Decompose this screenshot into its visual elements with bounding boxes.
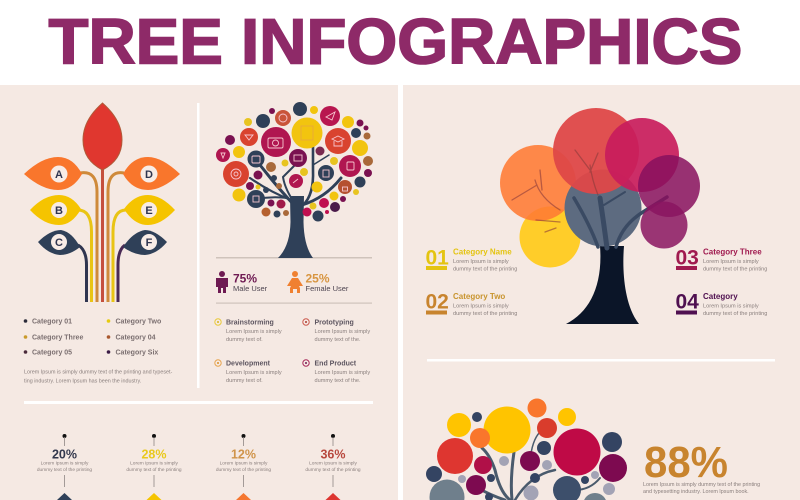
item: end product: End Product xyxy=(314,360,357,368)
chart: leaf stem diagram xyxy=(24,103,180,302)
tree icons xyxy=(221,112,354,202)
category 03: Lorem Ipsum is simply xyxy=(703,259,759,265)
chart: overlapping circle tree xyxy=(500,108,700,324)
item: brainstorming: dummy text of. xyxy=(226,337,263,343)
item: prototyping xyxy=(303,319,370,343)
category 04 xyxy=(676,290,767,317)
category 01: Category Name xyxy=(453,248,512,256)
item: development: Development xyxy=(226,360,271,368)
category 04: Lorem Ipsum is simply xyxy=(703,304,759,310)
stat: 12%: Lorem Ipsum is simply xyxy=(220,460,268,466)
item: development: Lorem Ipsum is simply xyxy=(226,370,282,376)
circle: magenta xyxy=(605,118,679,192)
stat: 36%: dummy text of the printing xyxy=(305,467,361,473)
stat: 28%: 28% xyxy=(141,448,167,462)
leaf F: F xyxy=(146,237,153,249)
stat: male user: 75% xyxy=(233,272,257,286)
stat: 88% xyxy=(643,438,760,495)
text block: left paragraph: Lorem Ipsum is simply dummy text of the printing and typeset- xyxy=(24,370,173,376)
item: prototyping: Lorem Ipsum is simply xyxy=(314,329,370,335)
stat: 28%: Lorem Ipsum is simply xyxy=(130,460,178,466)
stat: 88%: Lorem Ipsum is simply dummy text of the printing xyxy=(643,482,760,488)
category 02: 02 xyxy=(426,290,449,314)
stat: 36%: Lorem Ipsum is simply xyxy=(309,460,357,466)
item: end product xyxy=(303,360,370,384)
leaf A: A xyxy=(55,169,63,181)
leaf D: D xyxy=(145,169,153,181)
category 01 xyxy=(426,246,517,272)
item: end product: dummy text of the. xyxy=(314,378,361,384)
stat: 88%: and typesetting industry. Lorem Ipsum book. xyxy=(643,489,749,495)
leaf B: B xyxy=(55,205,63,217)
stat: 20%: dummy text of the printing xyxy=(37,467,92,473)
leaf C: C xyxy=(55,237,63,249)
tree branches xyxy=(478,432,600,500)
item: development: dummy text of. xyxy=(226,378,263,384)
category 04: 04 xyxy=(676,290,699,314)
stat: 28% xyxy=(126,434,182,500)
leaf D xyxy=(123,157,180,190)
category 04: dummy text of the printing xyxy=(703,311,767,317)
text block: left paragraph: ting industry. Lorem Ipsum has been the industry. xyxy=(24,378,141,384)
icon: female figure xyxy=(287,271,303,293)
leaf A xyxy=(24,157,82,190)
stat: female user: 25% xyxy=(306,272,330,286)
category 02: dummy text of the printing xyxy=(453,311,517,317)
leaf E: E xyxy=(145,205,153,217)
legend: categories: Category Two xyxy=(116,318,161,326)
legend: categories: Category 05 xyxy=(32,350,72,356)
branches inside slate circle xyxy=(574,192,667,248)
stat: 12%: 12% xyxy=(231,448,256,462)
leaf F xyxy=(123,230,167,255)
tree circles xyxy=(216,102,373,222)
item: prototyping: dummy text of the. xyxy=(314,337,361,343)
category 03: 03 xyxy=(676,246,699,270)
legend: categories: Category Six xyxy=(116,350,158,356)
circle: orange xyxy=(500,145,576,221)
leaf E xyxy=(124,195,175,225)
circle: red xyxy=(553,108,639,194)
item: prototyping: Prototyping xyxy=(314,320,354,326)
stat: 20%: Lorem Ipsum is simply xyxy=(41,460,89,466)
circle: slate xyxy=(564,170,642,246)
leaf C xyxy=(38,230,80,255)
stat: 12%: dummy text of the printing xyxy=(216,467,271,473)
circle: yellow xyxy=(520,206,580,268)
category 01: Lorem Ipsum is simply xyxy=(453,259,509,265)
category 03: Category Three xyxy=(703,248,762,256)
stat: 28%: dummy text of the printing xyxy=(126,467,182,473)
stat: female user: Female User xyxy=(306,284,349,293)
legend: categories: Category Three xyxy=(32,334,83,342)
circle: purple xyxy=(638,155,700,217)
text block: left paragraph xyxy=(24,370,173,384)
chart: icon tree xyxy=(216,102,373,258)
category 01: 01 xyxy=(426,246,449,270)
category 03 xyxy=(676,246,767,272)
icon: red top leaf xyxy=(83,103,122,170)
legend: categories: Category 04 xyxy=(116,334,156,342)
stat: 20%: 20% xyxy=(52,448,77,462)
stems xyxy=(78,165,126,302)
stat: 88%: 88% xyxy=(644,438,728,487)
stat: 20% xyxy=(37,434,92,500)
tree trunk and branches xyxy=(250,140,341,258)
leaf B xyxy=(30,195,81,225)
stat: 36% xyxy=(305,434,361,500)
legend: categories: Category 01 xyxy=(32,318,72,326)
item: brainstorming: Lorem Ipsum is simply xyxy=(226,329,282,335)
stat: male user xyxy=(216,271,268,293)
chart: bottom tree xyxy=(426,398,627,500)
item: end product: Lorem Ipsum is simply xyxy=(314,370,370,376)
stat: male user: Male User xyxy=(233,284,268,293)
category 01: dummy text of the printing xyxy=(453,266,517,272)
category 02: Lorem Ipsum is simply xyxy=(453,304,509,310)
category 03: dummy text of the printing xyxy=(703,266,767,272)
legend: categories xyxy=(24,318,161,356)
item: development xyxy=(215,360,282,384)
title: TREE INFOGRAPHICS xyxy=(48,5,742,77)
category 02: Category Two xyxy=(453,292,505,301)
tree circles xyxy=(484,406,530,454)
stat: 36%: 36% xyxy=(320,448,346,462)
item: brainstorming: Brainstorming xyxy=(226,320,274,326)
category 04: Category xyxy=(703,292,738,301)
item: brainstorming xyxy=(215,319,282,343)
tree trunk xyxy=(566,246,639,324)
category 02 xyxy=(426,290,517,317)
tree branches over foliage xyxy=(512,150,598,232)
icon: male figure xyxy=(216,271,228,293)
stat: female user xyxy=(287,271,349,293)
circle: lower purple xyxy=(640,202,688,248)
stat: 12% xyxy=(216,434,271,500)
ground line xyxy=(216,257,372,258)
